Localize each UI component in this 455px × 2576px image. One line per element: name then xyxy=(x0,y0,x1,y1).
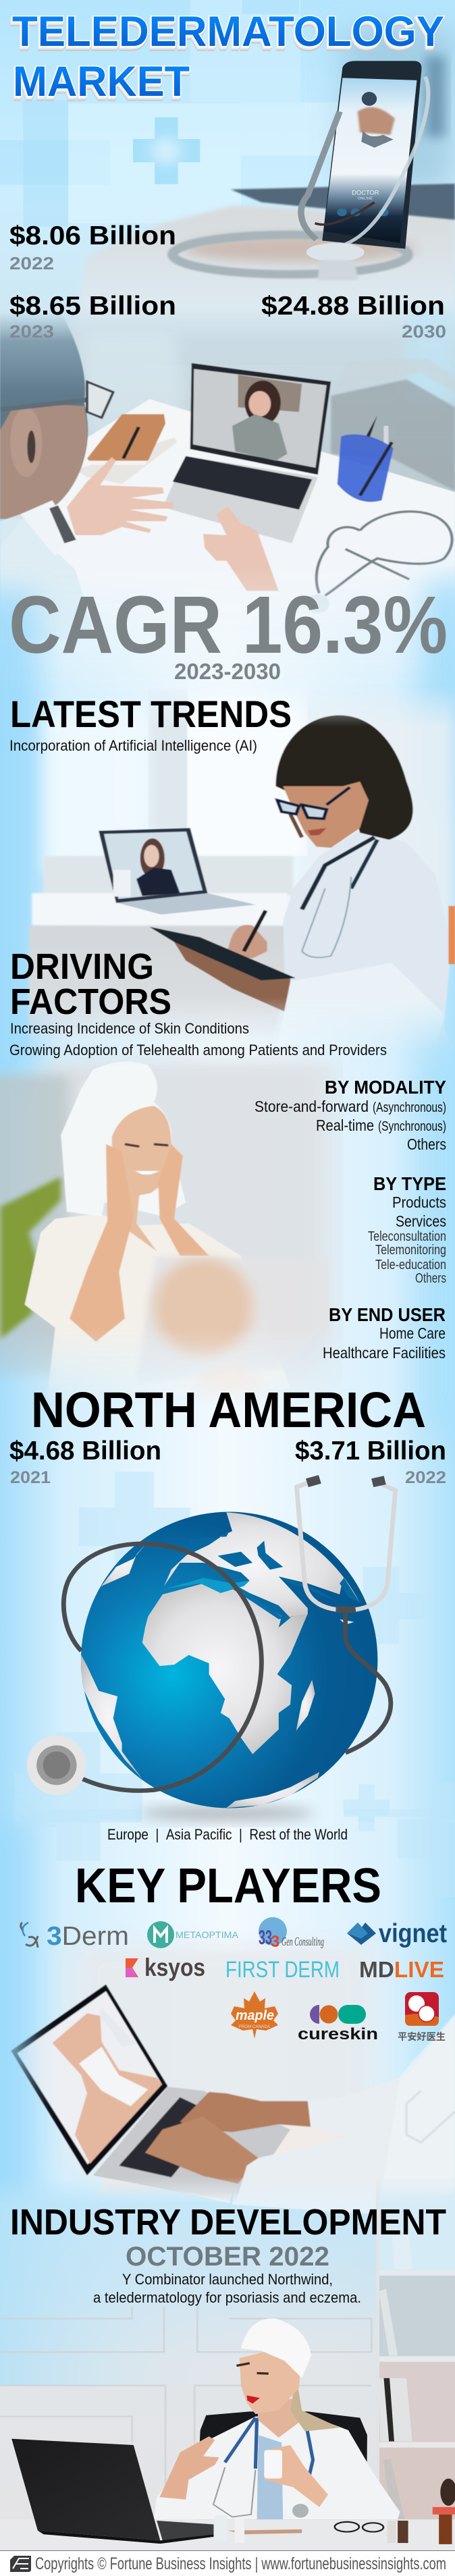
face xyxy=(283,782,369,848)
stethoscope headset xyxy=(296,1479,396,1753)
text: driving factors: Growing Adoption of Telehealth among Patients and Providers xyxy=(9,1042,387,1058)
doctor's white coat xyxy=(154,2413,400,2519)
logo: vignet xyxy=(347,1919,447,1948)
logo: Maple: maple xyxy=(236,2008,274,2023)
chart value: 2022 market size: 2022 xyxy=(9,253,54,273)
text: driving factors xyxy=(9,1020,387,1058)
chart value: 2023 market size: $8.65 Billion xyxy=(9,292,176,321)
heading: north america: NORTH AMERICA xyxy=(31,1382,426,1438)
panel: woman with towel photo xyxy=(0,1054,333,1407)
value: 2022 xyxy=(295,1437,446,1487)
laptop xyxy=(163,363,331,543)
logo: MDLive: MDLIVE xyxy=(359,1957,444,1982)
white desk xyxy=(24,399,455,671)
segment: by modality: Store-and-forward xyxy=(255,1098,369,1115)
segment: by modality xyxy=(255,1077,446,1153)
logo: MetaOptima xyxy=(147,1921,239,1948)
logo: MetaOptima: METAOPTIMA xyxy=(176,1929,239,1940)
icon: smartphone: DOCTOR xyxy=(352,190,379,196)
doctor's hair xyxy=(275,716,413,840)
white sleeves and coat xyxy=(232,2016,455,2214)
face xyxy=(240,2349,300,2414)
value: 2021 xyxy=(9,1437,161,1487)
blurred foreground laptop xyxy=(143,1254,279,1368)
title xyxy=(12,8,444,105)
text: driving factors: Increasing Incidence of Skin Conditions xyxy=(10,1020,249,1037)
logo: Maple: FROM CANADA xyxy=(239,2025,270,2029)
continents xyxy=(81,1512,360,1808)
logo: Cureskin: cureskin xyxy=(298,2025,378,2043)
heading: latest trends: LATEST TRENDS xyxy=(10,693,292,735)
desk xyxy=(0,2519,455,2550)
icon: smartphone xyxy=(322,61,421,249)
value: 2022: $3.71 Billion xyxy=(295,1437,446,1466)
window and wall xyxy=(186,689,308,856)
doctor's white coat xyxy=(0,514,96,640)
notebook with pen xyxy=(76,414,177,484)
nurse hat xyxy=(241,2318,311,2378)
logo: Cureskin xyxy=(298,2005,378,2043)
decorative edge glow: middle sections xyxy=(0,594,34,1080)
panel: doctor writing on clipboard photo xyxy=(29,689,455,1053)
logo: Maple xyxy=(231,1991,278,2039)
heading: driving factors: FACTORS xyxy=(10,982,171,1022)
watch xyxy=(49,506,76,543)
doctor's white coat xyxy=(278,832,450,1041)
hands and arms xyxy=(70,1144,134,1342)
desk items xyxy=(215,2507,455,2544)
segment: by modality: BY MODALITY xyxy=(325,1077,446,1098)
text: other regions: Europe | Asia Pacific | Rest of the World xyxy=(107,1826,348,1843)
text: development xyxy=(93,2271,361,2306)
decorative crosses near key players xyxy=(15,1809,455,1897)
decorative edge glow: key players xyxy=(0,1823,27,2255)
sleeve xyxy=(284,963,441,1015)
value: 2021: $4.68 Billion xyxy=(9,1437,161,1466)
heading: driving factors: DRIVING xyxy=(10,946,154,987)
logo: 3Gen Consulting: 33 xyxy=(259,1927,272,1949)
chart value: 2023 market size: 2023 xyxy=(9,321,54,342)
logo: Ping An Good Doctor: 平安好医生 xyxy=(398,2031,446,2042)
chart value: 2023 market size xyxy=(9,292,176,342)
logo row: 3Derm: 3Derm xyxy=(47,1922,129,1951)
segment: by type: Services xyxy=(396,1212,446,1230)
date: OCTOBER 2022 xyxy=(126,2242,329,2272)
pen cup xyxy=(338,415,394,502)
title: MARKET xyxy=(13,58,190,105)
icon: company logo xyxy=(10,2556,31,2572)
stethoscope tube xyxy=(63,1544,261,1791)
logo: 3Gen Consulting xyxy=(259,1917,324,1951)
text: development: Y Combinator launched Northwind, xyxy=(122,2271,333,2288)
icon: smartphone: ONLINE xyxy=(358,197,373,200)
face and neck xyxy=(112,1106,171,1251)
chart value: 2030 market size xyxy=(261,292,446,342)
segment: by modality: Others xyxy=(407,1135,446,1153)
segment: by end user: BY END USER xyxy=(329,1304,446,1325)
heading: driving factors xyxy=(10,946,171,1022)
value: 2021: 2021 xyxy=(10,1468,51,1487)
doctor's head xyxy=(0,312,113,519)
hands xyxy=(67,457,279,591)
panel: hero photo with phone and stethoscope xyxy=(0,0,455,365)
laptop screen xyxy=(11,1984,168,2176)
blurred hand at the bottom xyxy=(203,1372,255,1392)
segment: by type: Products xyxy=(392,1193,446,1211)
blurred plant xyxy=(0,1177,61,1339)
globe with stethoscope xyxy=(27,1479,396,1821)
footer xyxy=(0,2550,455,2576)
heading: key players: KEY PLAYERS xyxy=(75,1859,381,1913)
inland seas xyxy=(189,1531,360,1628)
towel xyxy=(61,1061,186,1216)
segment: by modality: Real-time xyxy=(316,1117,374,1134)
logo: ksyos xyxy=(126,1954,205,1981)
hands and pill bottle xyxy=(159,2436,219,2500)
hair strand xyxy=(290,2376,340,2432)
chart value: 2022 market size: $8.06 Billion xyxy=(9,221,176,250)
logo: Ping An Good Doctor xyxy=(398,1992,446,2042)
desk surface xyxy=(70,206,455,365)
black laptop xyxy=(11,2439,213,2544)
icon: medical cross xyxy=(133,117,200,184)
title: TELEDERMATOLOGY xyxy=(12,8,444,55)
text: development: a teledermatology for psoriasis and eczema. xyxy=(93,2289,361,2306)
stethoscope tubes xyxy=(301,111,340,240)
logo: vignet: vignet xyxy=(379,1919,447,1948)
neck xyxy=(257,2398,302,2438)
CAGR figure: 2023-2030 xyxy=(174,659,281,684)
logo: ksyos: ksyos xyxy=(144,1954,205,1981)
chair edge xyxy=(448,906,455,964)
bathrobe xyxy=(25,1214,290,1404)
office chair xyxy=(196,2411,367,2519)
floor chevrons xyxy=(331,379,455,491)
stethoscope ring on the desk xyxy=(173,235,408,274)
text: trend: Incorporation of Artificial Intelligence (AI) xyxy=(9,737,257,754)
panel: doctor in video call photo xyxy=(0,310,455,702)
chart value: 2030 market size: 2030 xyxy=(402,321,446,342)
small laptop with patient xyxy=(99,828,255,915)
segment: by end user xyxy=(323,1304,446,1362)
panel: laptop with hands photo xyxy=(11,1938,455,2214)
chart value: 2022 market size xyxy=(9,221,176,273)
hands on keyboard xyxy=(180,2092,312,2132)
segment: by type xyxy=(368,1173,446,1286)
globe sphere xyxy=(81,1512,377,1808)
glasses xyxy=(277,787,350,819)
logo: 3Gen Consulting: 3 xyxy=(271,1933,279,1951)
stethoscope xyxy=(317,512,452,595)
decorative crosses behind globe xyxy=(15,1472,455,1823)
wall moldings xyxy=(0,2306,371,2519)
value: 2022: 2022 xyxy=(405,1468,446,1487)
logo: 3Gen Consulting: Gen Consulting xyxy=(282,1935,324,1948)
panel: doctor with pill bottle photo xyxy=(0,2175,455,2550)
decorative edge glow: towel right xyxy=(422,1053,455,1431)
decorative edge glow: right upper xyxy=(425,581,455,810)
segment: by type: Others xyxy=(415,1271,446,1286)
blurred laptop behind the phone xyxy=(231,184,455,219)
bookcase xyxy=(376,2175,455,2550)
arm and clipboard xyxy=(174,942,290,1014)
laptop base xyxy=(93,2087,290,2203)
segment: by type: BY TYPE xyxy=(373,1173,446,1194)
stethoscope chest piece xyxy=(27,1736,86,1795)
chart value: 2030 market size: $24.88 Billion xyxy=(261,292,445,321)
logo: First Derm: FIRST DERM xyxy=(225,1957,340,1983)
